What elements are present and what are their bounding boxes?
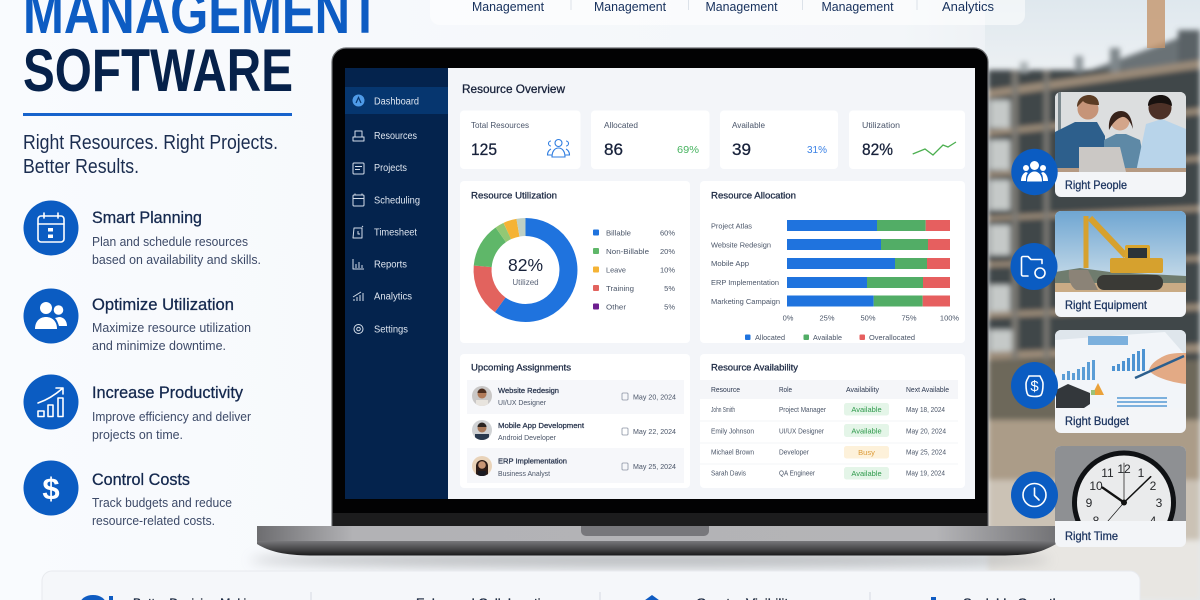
nav labels: Management (594, 0, 667, 14)
bar labels: Marketing Campaign (711, 297, 780, 306)
card: available (720, 110, 838, 169)
feature description: based on availability and skills. (92, 252, 261, 267)
laptop lid (332, 48, 988, 527)
card: utilization: 82% (862, 140, 893, 159)
feature title: Optimize Utilization (92, 295, 234, 314)
feature: smart planning (24, 200, 261, 267)
photo: wall clock: 8 (1093, 514, 1100, 528)
laptop shadow (250, 552, 1050, 568)
assignment: website redesign: Website Redesign (498, 386, 559, 395)
tagline: Better Results. (23, 156, 139, 178)
title rule (23, 113, 292, 116)
table rows: Emily Johnson (711, 426, 754, 436)
panel: resource availability (700, 354, 965, 488)
icon: clock badge (1011, 472, 1058, 518)
benefit: greater visibility (641, 595, 795, 600)
table rows (700, 405, 958, 478)
sidebar: settings: Settings (374, 324, 408, 336)
donut chart (483, 227, 568, 313)
sidebar (345, 68, 448, 499)
sidebar: analytics (353, 292, 412, 302)
status badges: Busy (858, 448, 875, 457)
panel title: Resource Utilization (471, 190, 557, 202)
feature title: Increase Productivity (92, 383, 243, 402)
bar labels: ERP Implementation (711, 278, 779, 287)
donut value: Utilized (512, 278, 539, 287)
icon: budget badge: $ (1030, 378, 1039, 395)
card: total resources: Total Resources (471, 121, 529, 130)
status badges (844, 403, 889, 480)
sidebar: analytics: Analytics (374, 292, 412, 302)
chart axis (783, 314, 959, 322)
table rows: May 20, 2024 (906, 426, 946, 436)
feature: optimize utilization (24, 288, 251, 353)
assignment: website redesign: May 20, 2024 (633, 392, 676, 402)
laptop base (257, 526, 1056, 556)
sidebar: projects (353, 163, 407, 174)
panel: resource utilization (460, 181, 690, 343)
photo: wall clock: 10 (1089, 479, 1103, 493)
screen (345, 68, 975, 499)
assignment: erp implementation: May 25, 2024 (633, 462, 676, 471)
nav labels: Analytics (942, 0, 994, 14)
table header: Availability (846, 385, 879, 394)
stacked bar chart (787, 220, 950, 306)
chart legend: Available (813, 333, 842, 342)
panel title: Resource Availability (711, 362, 798, 374)
donut value (508, 255, 543, 287)
sidebar: timesheet: Timesheet (374, 228, 417, 238)
assignment: erp implementation (472, 456, 676, 478)
table rows: Michael Brown (711, 448, 754, 456)
heading block (23, 0, 380, 178)
bar labels: Mobile App (711, 259, 749, 268)
icon: dollar: $ (42, 471, 60, 506)
sidebar: reports: Reports (374, 260, 407, 270)
feature description: Maximize resource utilization (92, 320, 251, 335)
assignment: website redesign (472, 386, 676, 407)
donut legend: Leave (606, 266, 626, 274)
bar labels: Website Redesign (711, 240, 771, 250)
donut legend: 60% (660, 228, 675, 238)
feature: increase productivity (24, 374, 252, 442)
heading: resource overview: Resource Overview (462, 82, 565, 96)
sidebar: resources (353, 131, 417, 142)
photo: wall clock: 4 (1150, 514, 1157, 528)
sidebar: resources: Resources (374, 131, 417, 142)
assignment: mobile app development: Android Developer (498, 433, 556, 442)
status badges: Available (851, 405, 882, 414)
donut legend: Training (606, 284, 634, 293)
photo: budget charts (1055, 330, 1186, 408)
photo: wall clock: 11 (1101, 466, 1114, 480)
nav labels (472, 0, 994, 14)
tagline: Right Resources. Right Projects. (23, 132, 278, 154)
feature description: projects on time. (92, 427, 183, 442)
table rows: Sarah Davis (711, 468, 746, 478)
bar labels (711, 222, 780, 306)
donut legend: 20% (660, 247, 675, 256)
table header: Next Available (906, 385, 949, 394)
donut legend: 10% (660, 266, 675, 274)
donut legend: Non-Billable (606, 247, 649, 256)
card: total resources: 125 (471, 140, 497, 159)
icon: growth chart (24, 374, 78, 430)
label: Right People (1065, 178, 1127, 192)
feature description: Plan and schedule resources (92, 234, 248, 249)
card: right time (1055, 446, 1186, 554)
label: Right Budget (1065, 414, 1130, 428)
icon: people badge (1011, 149, 1058, 195)
table header (700, 380, 958, 399)
sidebar: projects: Projects (374, 163, 407, 174)
panel: upcoming assignments (460, 354, 690, 488)
bar labels: Project Atlas (711, 222, 752, 230)
chart legend (745, 333, 915, 342)
card: allocated: 86 (604, 140, 623, 159)
feature title: Smart Planning (92, 208, 202, 227)
sidebar: scheduling (353, 194, 420, 206)
card: right equipment (1055, 211, 1186, 317)
donut legend: Billable (606, 228, 631, 238)
benefit: scalable growth (931, 596, 1060, 600)
photo: wall clock: 1 (1138, 466, 1145, 480)
card: allocated: 69% (677, 145, 699, 156)
assignment: mobile app development (472, 420, 676, 442)
card: right people (1055, 92, 1186, 197)
benefit: better decision making (80, 595, 260, 600)
sidebar: settings (354, 324, 408, 336)
feature description: Improve efficiency and deliver (92, 409, 252, 424)
label: Right Equipment (1065, 298, 1148, 312)
photo: wall clock: 2 (1150, 479, 1157, 493)
donut legend: 5% (664, 284, 675, 293)
status badges: Available (851, 426, 882, 436)
donut legend: 5% (664, 302, 675, 312)
icon: budget badge (1011, 362, 1058, 409)
card: available: Available (732, 121, 766, 130)
card: utilization (849, 110, 965, 169)
chart axis: 50% (860, 314, 876, 322)
sidebar: scheduling: Scheduling (374, 196, 420, 206)
table rows: Developer (779, 448, 809, 456)
sidebar: timesheet (353, 226, 417, 238)
table rows: May 19, 2024 (906, 468, 945, 478)
card: allocated: Allocated (604, 121, 638, 130)
card: allocated (591, 110, 710, 169)
table header: Resource (711, 385, 740, 394)
laptop (257, 48, 1056, 556)
nav labels: Management (706, 0, 778, 14)
table rows: May 25, 2024 (906, 448, 946, 456)
background: construction site photo (988, 30, 1200, 600)
table rows: QA Engineer (779, 468, 815, 478)
table rows: Project Manager (779, 405, 826, 414)
assignment: website redesign: UI/UX Designer (498, 398, 546, 407)
crane (1147, 0, 1165, 48)
chart axis: 100% (940, 314, 959, 322)
panel: resource allocation (700, 181, 965, 343)
donut legend (593, 228, 675, 312)
table rows: John Smith (711, 405, 735, 414)
chart legend: Allocated (755, 333, 785, 342)
photo: team at laptop (1055, 92, 1186, 172)
label: Right Time (1065, 529, 1118, 543)
assignment: mobile app development: May 22, 2024 (633, 427, 676, 436)
bottom benefits panel (42, 571, 1140, 600)
donut legend: Other (606, 302, 627, 312)
card: total resources (460, 110, 580, 169)
photo: wall clock: 3 (1156, 496, 1163, 510)
feature description: resource-related costs. (92, 513, 215, 528)
assignment: mobile app development: Mobile App Development (498, 421, 585, 430)
photo: excavator (1055, 211, 1186, 292)
icon: people (24, 288, 78, 344)
feature title: Control Costs (92, 470, 190, 489)
feature: control costs (24, 460, 232, 528)
title: software: SOFTWARE (23, 37, 293, 104)
nav labels: Management (822, 0, 894, 14)
table header: Role (779, 385, 792, 394)
table rows: May 18, 2024 (906, 405, 945, 414)
photo: wall clock (1055, 446, 1186, 521)
status badges: Available (851, 469, 882, 478)
chart axis: 0% (783, 314, 794, 322)
sidebar: reports (353, 259, 407, 270)
assignment: erp implementation: Business Analyst (498, 469, 551, 478)
icon: folder settings badge (1010, 243, 1058, 290)
chart axis: 75% (901, 314, 917, 322)
top navigation panel (430, 0, 1025, 25)
donut value: 82% (508, 255, 543, 275)
feature description: Track budgets and reduce (92, 495, 232, 510)
assignment: erp implementation: ERP Implementation (498, 456, 567, 466)
photo: wall clock: 9 (1086, 496, 1093, 510)
panel title: Upcoming Assignments (471, 362, 571, 374)
sparkline (913, 142, 956, 155)
sidebar: dashboard (352, 94, 419, 108)
chart axis: 25% (819, 314, 835, 322)
chart legend: Overallocated (869, 333, 915, 342)
photo: wall clock: 12 (1117, 462, 1131, 476)
icon: calendar (24, 200, 78, 256)
nav labels: Management (472, 0, 545, 14)
sidebar: dashboard: Dashboard (374, 96, 419, 108)
card: available: 39 (732, 140, 751, 159)
card: available: 31% (807, 145, 827, 156)
icon: dollar (24, 460, 78, 516)
card: utilization: Utilization (862, 121, 900, 130)
panel title: Resource Allocation (711, 190, 796, 202)
table rows: UI/UX Designer (779, 426, 824, 436)
feature description: and minimize downtime. (92, 338, 226, 353)
card: right budget (1055, 330, 1186, 433)
icon: team (548, 140, 570, 157)
